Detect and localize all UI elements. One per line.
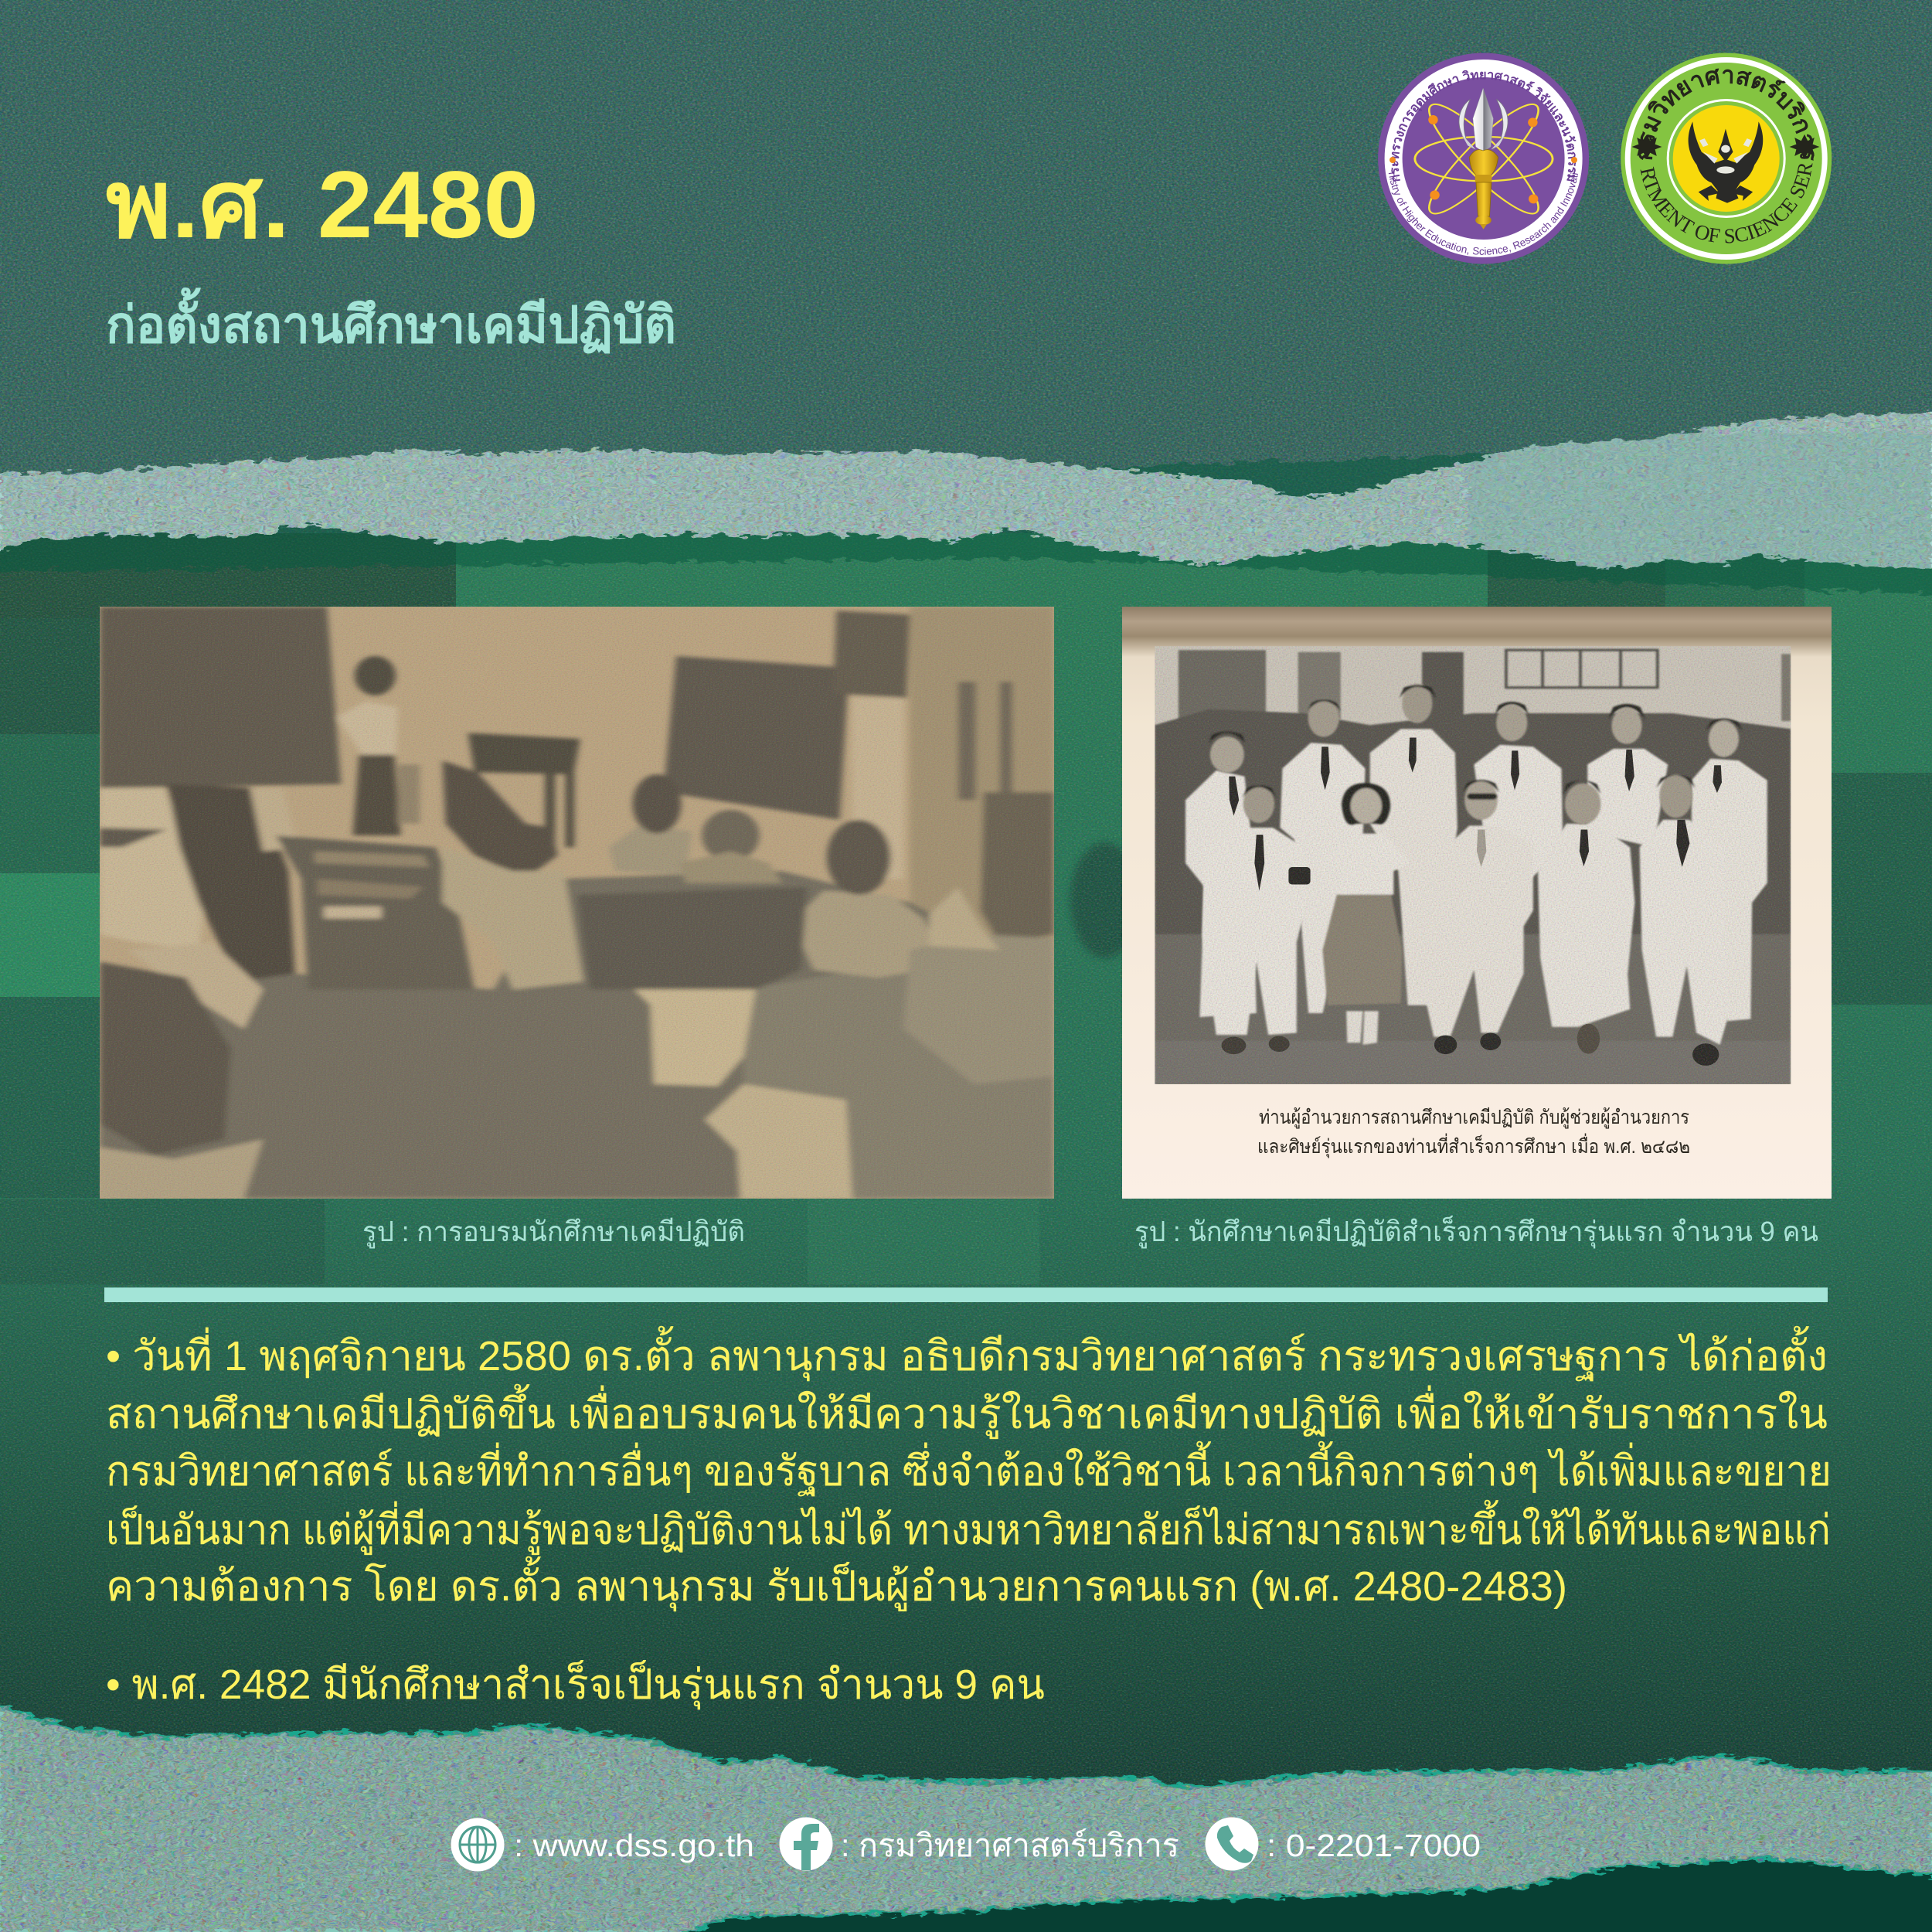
icon: telephone	[1206, 1818, 1258, 1870]
subtitle: ก่อตั้งสถานศึกษาเคมีปฏิบัติ	[106, 287, 676, 354]
footer facebook name: : กรมวิทยาศาสตร์บริการ	[841, 1828, 1179, 1863]
logo: Ministry of Higher Education, Science, Research and Innovation	[0, 0, 1589, 264]
standing faces	[1209, 684, 1743, 773]
logo: Department of Science Service	[0, 0, 1832, 264]
caption: right photo: รูป : นักศึกษาเคมีปฏิบัติสำเร็จการศึกษารุ่นแรก จำนวน 9 คน	[1134, 1214, 1818, 1249]
standing ties	[1229, 738, 1722, 816]
photo: first graduating class group portrait	[1122, 607, 1832, 1199]
body text: paragraph one: สถานศึกษาเคมีปฏิบัติขึ้น เพื่ออบรมคนให้มีความรู้ในวิชาเคมีทางปฏิบัติ เพื่อให้เข้ารับราชการใน	[106, 1384, 1828, 1439]
seated ties and shoes	[1222, 820, 1719, 1066]
background: upper dark teal paper	[0, 0, 1932, 587]
logo ring dots	[1389, 157, 1577, 163]
body text: paragraph one: เป็นอันมาก แต่ผู้ที่มีความรู้พอจะปฏิบัติงานไม่ได้ ทางมหาวิทยาลัยก็ไม่สามารถเพาะขึ้นให้ได้ทันและพอแก่	[106, 1500, 1831, 1555]
icon: globe	[451, 1818, 504, 1872]
logo emblem: atom and trident	[1415, 88, 1553, 230]
footer dark corner	[628, 1862, 1932, 1932]
logo stars	[1633, 135, 1818, 158]
torn paper band: top	[0, 402, 1932, 595]
text printed in the group photo	[1257, 1107, 1690, 1158]
title: พ.ศ. 2480	[106, 152, 539, 258]
icon: facebook	[779, 1818, 833, 1870]
divider bar	[104, 1287, 1828, 1302]
hedge and lawn	[1155, 709, 1791, 1088]
logo ring text: Thai: กระทรวงการอุดมศึกษา วิทยาศาสตร์ วิจัยและนวัตกรรม	[1391, 70, 1577, 182]
logo emblem: garuda	[1689, 121, 1763, 203]
logo ring text: Thai: กรมวิทยาศาสตร์บริการ	[1638, 68, 1815, 161]
text printed in the group photo: ท่านผู้อำนวยการสถานศึกษาเคมีปฏิบัติ กับผู้ช่วยผู้อำนวยการ	[1259, 1107, 1689, 1129]
torn paper band: bottom	[0, 1692, 1932, 1932]
body text: paragraph one	[106, 1326, 1832, 1612]
body text: paragraph one: กรมวิทยาศาสตร์ และที่ทำการอื่นๆ ของรัฐบาล ซึ่งจำต้องใช้วิชานี้ เวลานี้กิจการต่างๆ ได้เพิ่มและขยาย	[106, 1441, 1832, 1496]
body text: paragraph one: • วันที่ 1 พฤศจิกายน 2580 ดร.ตั้ว ลพานุกรม อธิบดีกรมวิทยาศาสตร์ กระทรวงเศรษฐการ ได้ก่อตั้ง	[106, 1326, 1828, 1382]
background: lower green paper with patches	[0, 533, 1932, 1932]
body text: paragraph one: ความต้องการ โดย ดร.ตั้ว ลพานุกรม รับเป็นผู้อำนวยการคนแรก (พ.ศ. 2480-2483)	[106, 1556, 1567, 1612]
photo: chemistry training classroom	[100, 607, 1054, 1199]
footer website: : www.dss.go.th	[514, 1828, 754, 1863]
building windows and wall	[1179, 650, 1791, 723]
caption: left photo: รูป : การอบรมนักศึกษาเคมีปฏิบัติ	[362, 1216, 745, 1249]
standing group	[1185, 729, 1767, 1021]
body text: paragraph two: • พ.ศ. 2482 มีนักศึกษาสำเร็จเป็นรุ่นแรก จำนวน 9 คน	[106, 1660, 1045, 1710]
text printed in the group photo: และศิษย์รุ่นแรกของท่านที่สำเร็จการศึกษา เมื่อ พ.ศ. ๒๔๘๒	[1257, 1133, 1690, 1158]
seated faces	[1242, 774, 1696, 825]
seated row	[1202, 820, 1730, 1045]
footer telephone number: : 0-2201-7000	[1267, 1828, 1481, 1863]
